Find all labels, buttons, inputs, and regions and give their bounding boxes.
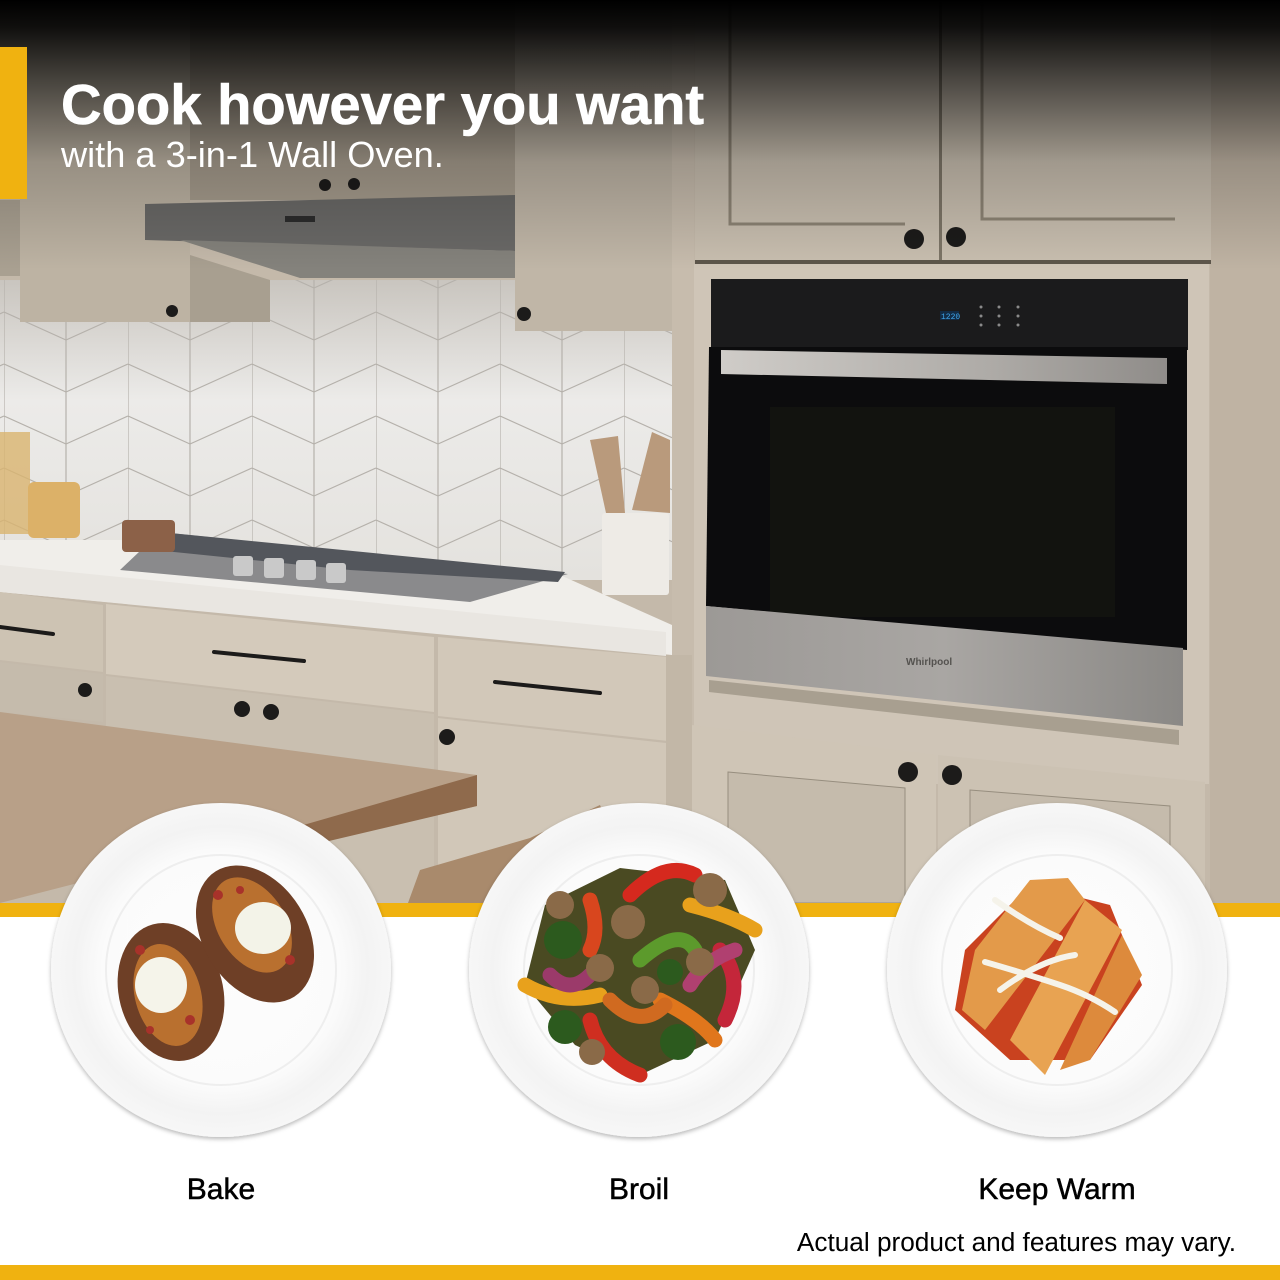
- plate: baked potatoes: [51, 803, 391, 1137]
- top dark gradient: [0, 0, 1280, 270]
- jars and utensils: [0, 432, 30, 534]
- oven: [711, 279, 1188, 350]
- label: Bake: Bake: [187, 1173, 255, 1206]
- upper cabinets right: [695, 0, 1211, 260]
- cooktop: [120, 532, 568, 602]
- oven control dots: [980, 306, 1020, 326]
- title: Cook however you want: [61, 73, 704, 136]
- oven surround: [694, 264, 1209, 784]
- table: [0, 712, 477, 903]
- lower cabinets left: [0, 592, 103, 672]
- upper cabinets left: [20, 0, 190, 322]
- oven logo: Whirlpool: [906, 657, 952, 668]
- disclaimer: Actual product and features may vary.: [797, 1227, 1236, 1257]
- lower cabinets right: [692, 725, 936, 903]
- backsplash: [0, 280, 672, 580]
- range hood: [145, 195, 515, 251]
- countertop: [0, 540, 672, 655]
- hood buttons: [285, 216, 315, 222]
- subtitle: with a 3-in-1 Wall Oven.: [61, 134, 444, 175]
- plate: broiled vegetables: [469, 803, 809, 1137]
- label: Broil: Broil: [609, 1173, 669, 1206]
- label: Keep Warm: Keep Warm: [978, 1173, 1136, 1206]
- oven display: 1220: [941, 313, 960, 322]
- plate: enchiladas: [887, 803, 1227, 1137]
- right pillar: [672, 0, 694, 903]
